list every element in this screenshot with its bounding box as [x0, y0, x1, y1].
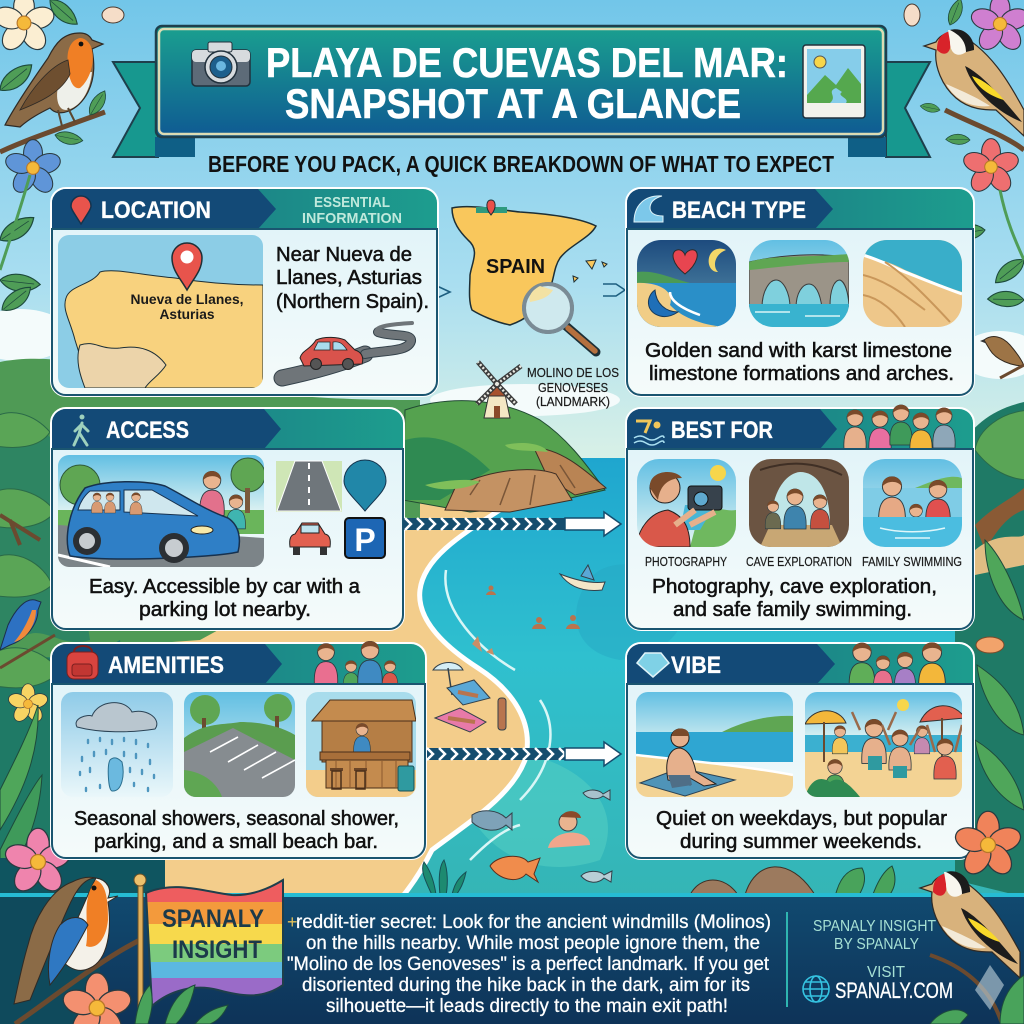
- heading: access: ACCESS: [106, 417, 189, 444]
- title banner: [156, 26, 886, 137]
- panel: vibe: [627, 642, 973, 858]
- image: parking lot: [184, 692, 295, 797]
- robin bottom left with branch: [14, 877, 140, 1024]
- image: beach at night with heart and moons: [637, 240, 736, 327]
- image: blue car with family: [58, 455, 265, 567]
- map arrows: [437, 284, 625, 298]
- panel: best for: [627, 405, 973, 629]
- footer credit block: VISIT: [867, 964, 905, 981]
- arrow: access to best for: [403, 512, 621, 536]
- footer tip text: silhouette—it leads directly to the main exit path!: [326, 996, 728, 1017]
- image: beach bar: [306, 692, 416, 797]
- panel: beach type: [627, 189, 973, 395]
- activity labels: [645, 555, 962, 569]
- title text: SNAPSHOT AT A GLANCE: [285, 80, 741, 127]
- icon: parking sign: [345, 518, 385, 558]
- access text: parking lot nearby.: [139, 599, 311, 621]
- title text: [266, 39, 788, 127]
- rocks and plants above footer: [690, 866, 895, 897]
- flowers and leaves top left: [0, 0, 124, 315]
- right forest: [955, 402, 1024, 897]
- amenities text: parking, and a small beach bar.: [94, 831, 378, 853]
- landmark label: MOLINO DE LOS: [527, 366, 619, 380]
- beach type text: limestone formations and arches.: [649, 363, 954, 385]
- footer tip text: "Molino de los Genoveses" is a perfect landmark. If you get: [287, 954, 770, 975]
- vibe text: Quiet on weekdays, but popular: [656, 808, 947, 830]
- footer credit block: SPANALY.COM: [835, 978, 953, 1003]
- header family: [314, 641, 398, 689]
- icon: red car: [290, 523, 330, 555]
- image: rain cloud shower: [61, 692, 173, 797]
- essential information label: ESSENTIAL: [314, 194, 390, 211]
- bluebird left: [0, 600, 55, 668]
- small brown bird right: [980, 337, 1024, 378]
- robin top left with branch: [0, 33, 105, 152]
- heading: beach type: BEACH TYPE: [672, 197, 806, 224]
- arrow: amenities to vibe: [425, 742, 621, 766]
- location text: [276, 244, 429, 313]
- activity labels: CAVE EXPLORATION: [746, 555, 852, 569]
- heading: best for: BEST FOR: [671, 417, 773, 444]
- activity labels: FAMILY SWIMMING: [862, 555, 962, 569]
- beach type text: Golden sand with karst limestone: [645, 340, 952, 362]
- vibe text: during summer weekends.: [680, 831, 922, 853]
- orange flower over vibe panel corner: [952, 811, 1024, 879]
- amenities text: [74, 808, 399, 853]
- beach umbrellas and sunbathers: [433, 662, 506, 732]
- footer credit block: SPANALY INSIGHT: [813, 918, 936, 935]
- footer tip text: [287, 912, 771, 1017]
- heading: vibe: VIBE: [671, 652, 721, 679]
- clouds: [0, 309, 1024, 416]
- footer tip text: +: [287, 912, 298, 932]
- sandy shoreline: [100, 490, 550, 897]
- left forest hills: [0, 359, 420, 897]
- location text: Llanes, Asturias: [276, 267, 422, 289]
- icon: location pin: [71, 196, 91, 224]
- header people: [844, 405, 955, 453]
- flag text: [162, 905, 264, 964]
- footer credit block: [786, 912, 953, 1007]
- flag text: SPANALY: [162, 905, 264, 933]
- flowers and foliage lower left: [0, 540, 1024, 898]
- heading: location: LOCATION: [101, 197, 211, 224]
- icon: road: [276, 461, 342, 512]
- heading: amenities: AMENITIES: [108, 652, 224, 679]
- sea: [380, 458, 1024, 898]
- Spain mini map: [452, 200, 607, 352]
- icon: camera: [192, 42, 250, 86]
- best for text: Photography, cave exploration,: [652, 576, 937, 598]
- activity labels: PHOTOGRAPHY: [645, 555, 728, 569]
- essential information label: INFORMATION: [302, 210, 402, 227]
- image: photography: [637, 459, 736, 547]
- subtitle: BEFORE YOU PACK, A QUICK BREAKDOWN OF WHAT TO EXPECT: [208, 151, 834, 177]
- footer credit block: BY SPANALY: [834, 936, 919, 953]
- icon: walking person: [74, 414, 88, 445]
- access text: Easy. Accessible by car with a: [89, 576, 361, 598]
- icon: magnifying glass: [523, 283, 596, 352]
- sky background: [0, 0, 1024, 470]
- icon: swimmer: [634, 421, 664, 445]
- access text: [89, 576, 361, 621]
- image: cave exploration: [749, 459, 849, 547]
- panel: location: [52, 189, 437, 395]
- map of northern Spain: [58, 235, 263, 388]
- icon: landscape photo: [803, 45, 865, 118]
- flowers and leaves top right: [904, 0, 1024, 310]
- image: crowded party beach: [805, 692, 965, 797]
- landmark label: [527, 366, 619, 409]
- flag text: INSIGHT: [172, 936, 262, 964]
- best for text: [652, 576, 937, 621]
- map of northern Spain: Nueva de Llanes,: [130, 292, 244, 307]
- footer tip text: reddit-tier secret: Look for the ancient windmills (Molinos): [296, 912, 771, 933]
- road and red car: [282, 323, 412, 378]
- landmark label: GENOVESES: [538, 381, 608, 395]
- central headland with windmill hill: [403, 401, 606, 512]
- footer tip text: disoriented during the hike back in the dark, aim for its: [302, 975, 750, 996]
- icon: wave: [634, 196, 663, 222]
- bottom flower and leaves: [60, 973, 228, 1024]
- goldfinch bottom right: [920, 871, 1024, 1024]
- footer tip text: on the hills nearby. While most people ignore them, the: [306, 933, 760, 954]
- Spain mini map: SPAIN: [486, 256, 545, 278]
- icon: diamond: [637, 653, 669, 677]
- essential information label: [302, 194, 402, 227]
- best for text: and safe family swimming.: [673, 599, 912, 621]
- header group of friends: [849, 642, 945, 691]
- location text: Near Nueva de: [276, 244, 412, 266]
- goldfinch top right with branch: [924, 29, 1024, 150]
- title text: PLAYA DE CUEVAS DEL MAR:: [266, 39, 788, 86]
- swimmers boat and fish in the sea: [423, 565, 612, 895]
- amenities text: Seasonal showers, seasonal shower,: [74, 808, 399, 830]
- location text: (Northern Spain).: [276, 291, 429, 313]
- vibe text: [656, 808, 947, 853]
- footer bar: [0, 893, 1024, 1024]
- icon: parking sign: P: [354, 522, 376, 558]
- image: limestone arches: [749, 240, 849, 327]
- beach type text: [645, 340, 954, 385]
- image: rippled sand: [863, 240, 962, 327]
- rainbow flag: [134, 874, 284, 1008]
- title ribbon: [113, 62, 930, 157]
- panel: access: [52, 409, 403, 629]
- map of northern Spain: Asturias: [160, 307, 214, 322]
- icon: windmill landmark: [477, 362, 521, 418]
- image: quiet beach: [636, 692, 793, 797]
- image: family swimming: [863, 459, 962, 547]
- landmark label: (LANDMARK): [536, 395, 610, 409]
- panel: amenities: [52, 641, 425, 858]
- icon: backpack: [67, 646, 98, 679]
- icon: trail pin: [344, 460, 386, 511]
